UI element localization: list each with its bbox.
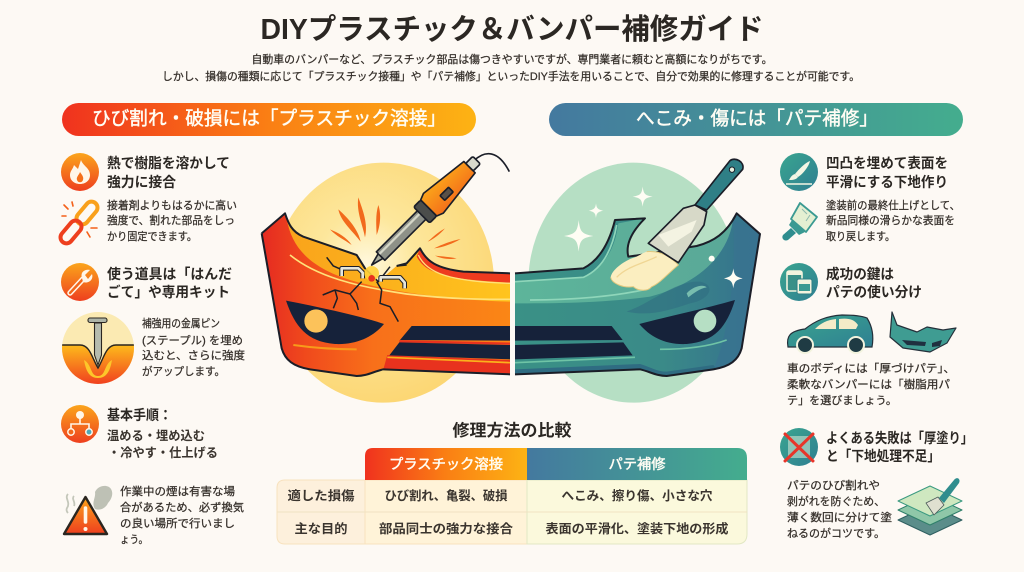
intro text: 自動車のバンパーなど、プラスチック部品は傷つきやすいですが、専門業者に頼むと高額になりがちです。 xyxy=(252,52,772,66)
heading: common failures xyxy=(826,430,973,464)
row: suitable damage: へこみ、擦り傷、小さな穴 xyxy=(562,488,713,503)
text: final finish: 取り戻します。 xyxy=(826,230,895,243)
text: staple pins xyxy=(142,317,245,378)
text: adhesive strength: かり固定できます。 xyxy=(107,230,197,243)
yellow sun circle xyxy=(273,163,494,403)
right heading pill: へこみ・傷には「パテ補修」 xyxy=(636,108,878,130)
icon: staple pin in plastic xyxy=(62,312,134,384)
row: suitable damage: 適した損傷 xyxy=(288,488,355,503)
text: thin coats: パテのひび割れや xyxy=(787,479,880,492)
text: ventilation warning: 合があるため、必ず換気 xyxy=(120,500,244,514)
text: choose putty: 車のボディには「厚づけパテ」、 xyxy=(787,361,955,375)
text: thin coats: 剥がれを防ぐため、 xyxy=(787,494,885,508)
icon: flame xyxy=(61,153,99,191)
header: putty repair: パテ補修 xyxy=(608,456,666,472)
text: staple pins: (ステープル) を埋め xyxy=(142,334,243,347)
icon: broken chain xyxy=(58,199,100,246)
row: main purpose: 部品同士の強力な接合 xyxy=(379,521,514,536)
row: suitable damage: ひび割れ、亀裂、破損 xyxy=(384,488,508,503)
dent xyxy=(627,282,709,313)
icon: paint brush xyxy=(782,203,817,241)
header: plastic welding: プラスチック溶接 xyxy=(389,456,503,472)
right heading pill xyxy=(549,103,963,136)
cracked orange bumper xyxy=(262,197,510,376)
row: main purpose: 主な目的 xyxy=(294,521,348,536)
icon: wrench xyxy=(61,263,99,301)
icon: process flow xyxy=(61,405,99,443)
row: main purpose xyxy=(294,521,729,536)
text: basic steps xyxy=(107,407,218,460)
heading: tools xyxy=(107,266,232,300)
text: thin coats xyxy=(787,479,892,540)
icon: putty jars xyxy=(780,263,818,301)
text: adhesive strength xyxy=(107,198,237,243)
left heading pill xyxy=(62,103,476,136)
heading: heat melt: 強力に接合 xyxy=(107,174,176,190)
text: thin coats: 薄く数回に分けて塗 xyxy=(787,510,892,524)
text: adhesive strength: 接着剤よりもはるかに高い xyxy=(107,198,237,212)
heading: common failures: よくある失敗は「厚塗り」 xyxy=(826,430,973,446)
header: putty repair xyxy=(527,448,747,480)
panel: putty repair column xyxy=(780,153,973,540)
text: choose putty: テ」を選びましょう。 xyxy=(787,394,897,407)
heading: key to success: 成功の鍵は xyxy=(826,266,894,282)
right grille xyxy=(515,326,623,341)
icon: car xyxy=(788,315,873,353)
left heading pill: ひび割れ・破損には「プラスチック溶接」 xyxy=(92,108,446,130)
text: choose putty: 柔軟なバンパーには「樹脂用パ xyxy=(787,377,950,391)
soldering iron xyxy=(362,150,509,275)
green circle xyxy=(528,163,738,403)
text: ventilation warning: の良い場所で行いまし xyxy=(120,516,235,530)
left grille xyxy=(400,326,510,341)
heading: heat melt xyxy=(107,155,230,190)
icon: warning with smoke xyxy=(64,486,112,534)
text: basic steps: 基本手順： xyxy=(107,407,172,423)
text: staple pins: 補強用の金属ピン xyxy=(142,317,220,330)
text: thin coats: ねるのがコツです。 xyxy=(787,526,885,540)
text: choose putty xyxy=(787,361,955,407)
row: main purpose: 表面の平滑化、塗装下地の形成 xyxy=(546,521,729,536)
text: ventilation warning: 作業中の煙は有害な場 xyxy=(120,484,235,498)
heading: smooth surface: 凹凸を埋めて表面を xyxy=(826,155,948,171)
heat rays xyxy=(330,197,461,259)
heading: smooth surface xyxy=(826,155,948,190)
header: plastic welding xyxy=(365,448,527,480)
right fog lamp xyxy=(639,300,735,344)
staples xyxy=(342,268,363,278)
title: DIYプラスチック＆バンパー補修ガイド xyxy=(260,13,764,46)
panel: plastic welding column xyxy=(58,153,245,546)
illustration: bumper repair comparison xyxy=(262,150,760,403)
heading: common failures: と「下地処理不足」 xyxy=(826,448,940,464)
text: staple pins: 込むと、さらに強度 xyxy=(142,349,245,362)
sparkles xyxy=(564,187,743,288)
icon: spreading putty xyxy=(780,153,818,191)
heading: heat melt: 熱で樹脂を溶かして xyxy=(107,155,230,171)
filler paste xyxy=(611,251,678,290)
heading: smooth surface: 平滑にする下地作り xyxy=(826,174,948,190)
intro text xyxy=(162,52,860,83)
heading: tools: 使う道具は「はんだ xyxy=(107,266,232,282)
heading: key to success: パテの使い分け xyxy=(826,284,922,300)
comparison table xyxy=(277,420,747,544)
text: final finish xyxy=(826,198,960,243)
table body background xyxy=(277,480,747,544)
text: staple pins: がアップします。 xyxy=(142,364,225,378)
putty knife xyxy=(648,159,743,263)
text: final finish: 塗装前の最終仕上げとして、 xyxy=(826,198,960,212)
heading: tools: ごて」や専用キット xyxy=(107,284,230,300)
icon: crossed out failure xyxy=(780,428,818,466)
text: ventilation warning: ょう。 xyxy=(120,533,148,546)
cracks xyxy=(323,255,407,322)
text: basic steps: ・冷やす・仕上げる xyxy=(108,445,218,460)
text: adhesive strength: 強度で、割れた部品をしっ xyxy=(107,214,235,227)
left fog lamp xyxy=(286,301,384,344)
row: suitable damage xyxy=(288,488,713,503)
heading: key to success xyxy=(826,266,922,300)
icon: small bumper xyxy=(890,312,956,352)
text: ventilation warning xyxy=(120,484,244,546)
icon: layers with knife xyxy=(898,478,962,535)
text: final finish: 新品同様の滑らかな表面を xyxy=(826,213,955,227)
repaired green bumper xyxy=(515,213,760,376)
text: basic steps: 温める・埋め込む xyxy=(107,428,205,443)
table title: 修理方法の比較 xyxy=(452,420,572,440)
intro text: しかし、損傷の種類に応じて「プラスチック接種」や「パテ補修」といったDIY手法を用いることで、自分で効果的に修理することが可能です。 xyxy=(162,69,860,83)
